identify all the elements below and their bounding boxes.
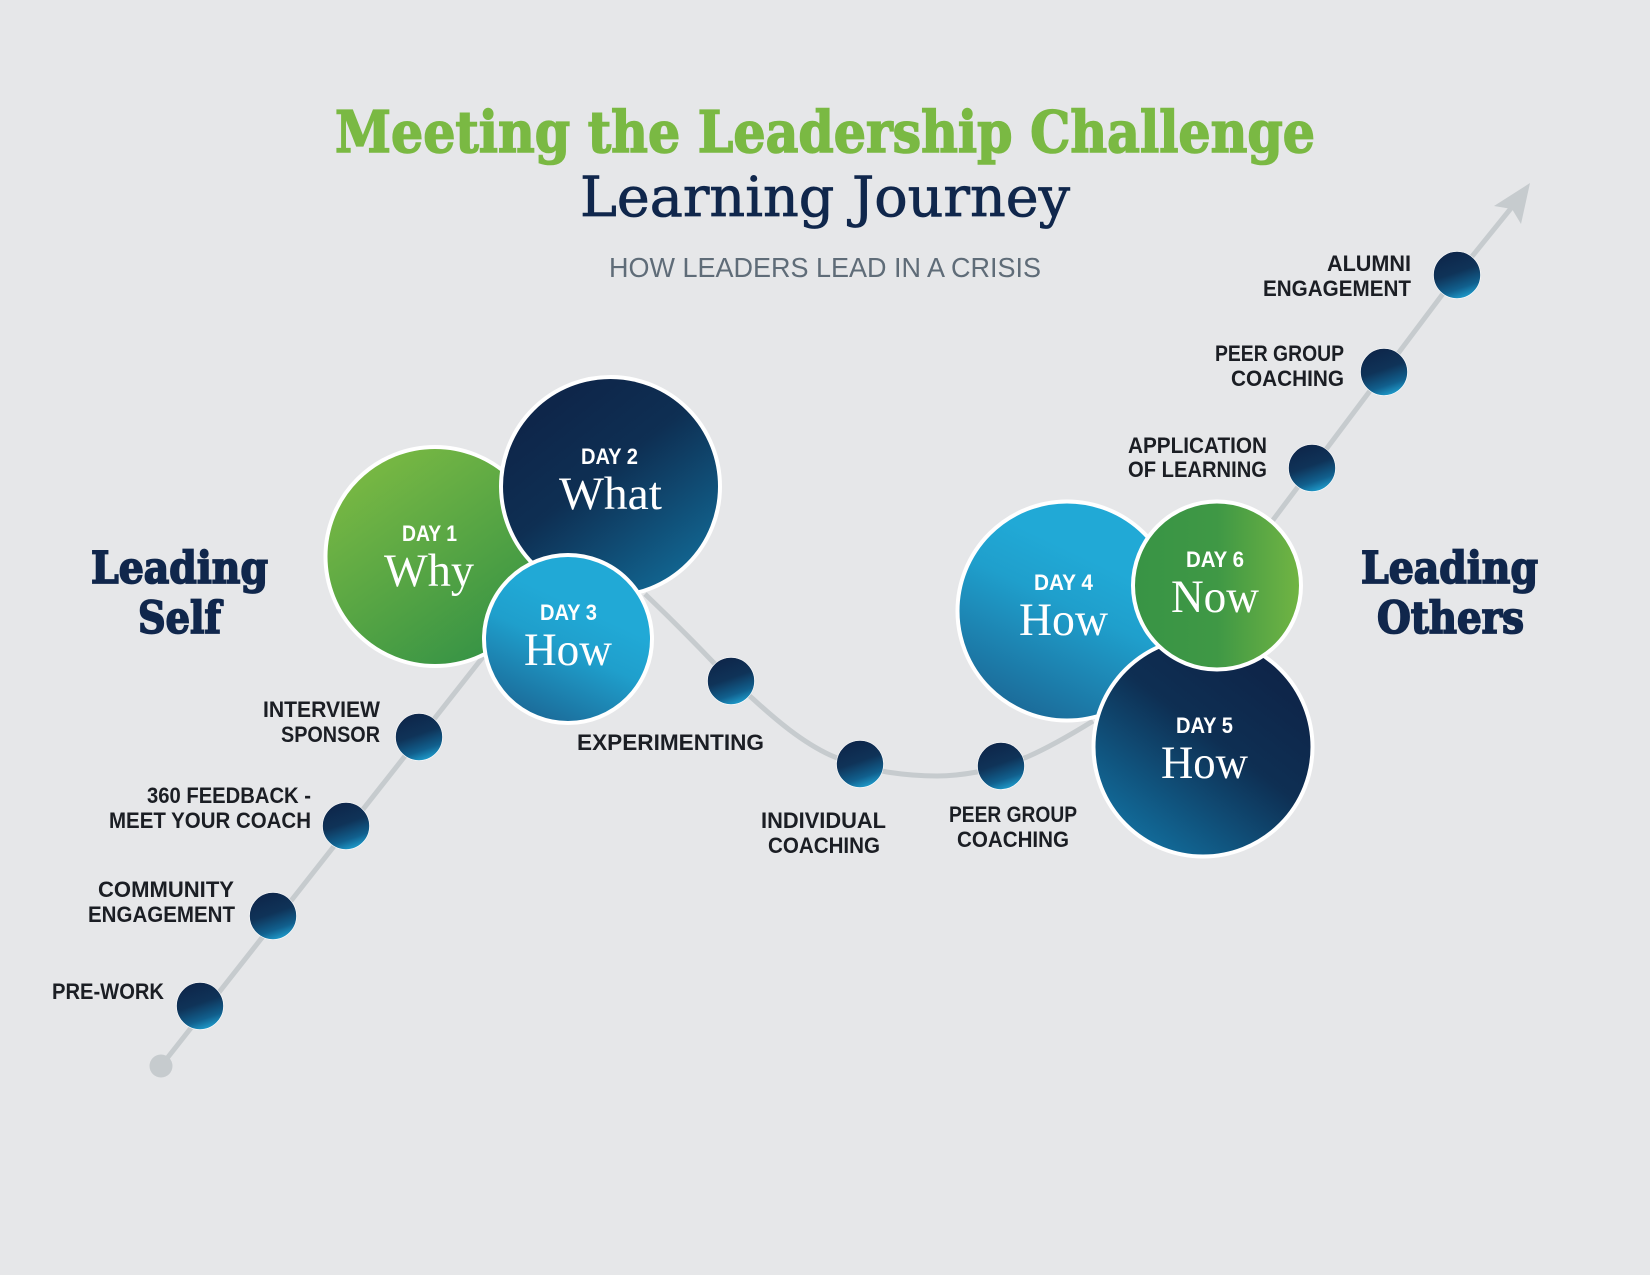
heading: Leading Others [1361,543,1538,644]
milestone: 360 feedback: 360 FEEDBACK - [147,783,311,808]
heading: Meeting the Leadership Challenge: Meeting the Leadership Challenge [335,99,1315,166]
day 1 circle [326,447,544,666]
day 6 circle: Now [1171,571,1259,623]
day 3 circle: DAY 3 [540,600,597,625]
milestone: interview sponsor [263,697,442,760]
milestone: alumni engagement [1263,251,1480,301]
milestone: application of learning: APPLICATION [1128,433,1267,458]
milestone: individual coaching: INDIVIDUAL [761,808,886,833]
day 6 circle: DAY 6 [1186,547,1244,572]
day 4 circle: How [1019,594,1108,646]
heading: Leading Self: Self [138,593,224,644]
heading: Leading Others: Others [1377,593,1524,644]
milestone: community engagement: ENGAGEMENT [88,902,236,927]
milestone: 360 feedback [109,783,370,850]
day 5 circle [1094,638,1312,856]
milestone: individual coaching [761,740,886,858]
milestone: experimenting [577,658,764,755]
milestone: peer group coaching, upper: PEER GROUP [1215,341,1344,366]
day 5 circle: DAY 5 [1176,713,1233,738]
day 4 circle: DAY 4 [1034,570,1094,595]
day 1 circle: DAY 1 [402,521,457,546]
heading: Leading Self [91,543,268,644]
day 2 circle: DAY 2 [581,444,638,469]
day 1 circle: Why [384,545,474,597]
arrowhead [1494,183,1530,224]
milestone: individual coaching: COACHING [768,833,880,858]
heading: Leading Others: Leading [1361,543,1538,594]
milestone: application of learning: OF LEARNING [1128,457,1267,482]
day 2 circle [501,377,720,596]
milestone: interview sponsor: INTERVIEW [263,697,380,722]
milestone: community engagement: COMMUNITY [98,877,234,902]
milestone: pre-work: PRE-WORK [52,979,164,1004]
day 2 circle: What [559,468,662,520]
day 5 circle: How [1161,737,1248,789]
day 3 circle [484,555,652,723]
subtitle: HOW LEADERS LEAD IN A CRISIS [609,252,1041,283]
milestone: interview sponsor: SPONSOR [281,722,380,747]
milestone: experimenting: EXPERIMENTING [577,730,764,755]
start dot [150,1054,172,1078]
journey path line [161,207,1512,1066]
milestone: community engagement [88,877,296,940]
milestone: peer group coaching, upper: COACHING [1231,366,1344,391]
title [335,99,1315,283]
milestone: peer group coaching, upper [1215,341,1408,396]
circle cluster: days 4 to 6 [958,502,1312,856]
circle cluster: days 1 to 3 [326,377,720,723]
day 3 circle: How [524,624,612,676]
milestone: application of learning [1128,433,1336,492]
milestone: peer group coaching, mid [949,742,1077,852]
milestone: pre-work [52,979,224,1030]
milestone: peer group coaching, mid: COACHING [957,827,1069,852]
milestone: 360 feedback: MEET YOUR COACH [109,808,311,833]
heading: Learning Journey: Learning Journey [580,165,1070,229]
milestone: alumni engagement: ALUMNI [1327,251,1411,276]
day 4 circle [958,502,1176,720]
day 6 circle [1133,502,1301,670]
heading: Leading Self: Leading [91,543,268,594]
milestone: peer group coaching, mid: PEER GROUP [949,802,1077,827]
milestone: alumni engagement: ENGAGEMENT [1263,276,1412,301]
